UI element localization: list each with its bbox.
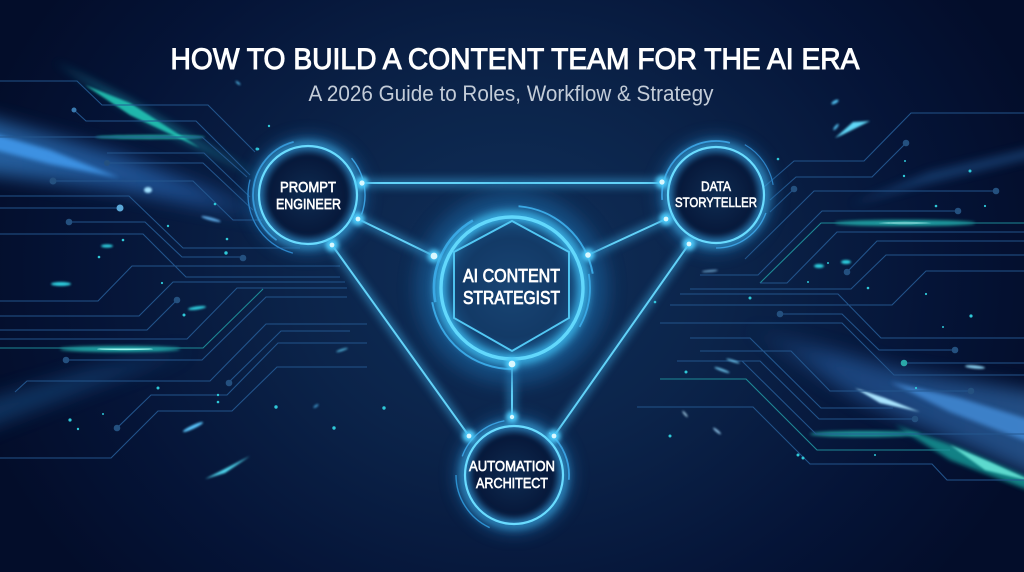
circuit nodes: right: [777, 140, 999, 422]
connection junction dots: [326, 176, 696, 442]
circuit nodes: left: [50, 108, 246, 431]
label: data storyteller: STORYTELLER: [675, 194, 757, 210]
label: automation architect: ARCHITECT: [476, 475, 548, 492]
label: ai content strategist: [463, 265, 560, 308]
node: ai content strategist: [416, 192, 608, 384]
node: data storyteller: [637, 116, 795, 274]
hexagon: [454, 221, 569, 351]
node: automation architect: [437, 398, 591, 552]
circuit traces: right: [637, 113, 1024, 480]
label: ai content strategist: AI CONTENT: [463, 265, 560, 286]
node: prompt engineer: [228, 115, 388, 275]
circuit traces: left: [0, 81, 367, 458]
label: prompt engineer: [276, 179, 341, 213]
label: data storyteller: [675, 178, 757, 210]
label: ai content strategist: STRATEGIST: [463, 287, 560, 308]
label: data storyteller: DATA: [701, 178, 732, 194]
label: automation architect: AUTOMATION: [469, 458, 555, 475]
particles and sparks: [51, 80, 986, 479]
label: prompt engineer: ENGINEER: [276, 196, 341, 213]
label: prompt engineer: PROMPT: [280, 179, 336, 196]
label: automation architect: [469, 458, 555, 492]
light beams: [0, 62, 1024, 496]
subtitle: A 2026 Guide to Roles, Workflow & Strategy: [308, 81, 714, 106]
connector lines: [332, 183, 689, 436]
title: HOW TO BUILD A CONTENT TEAM FOR THE AI ERA: [170, 43, 860, 76]
